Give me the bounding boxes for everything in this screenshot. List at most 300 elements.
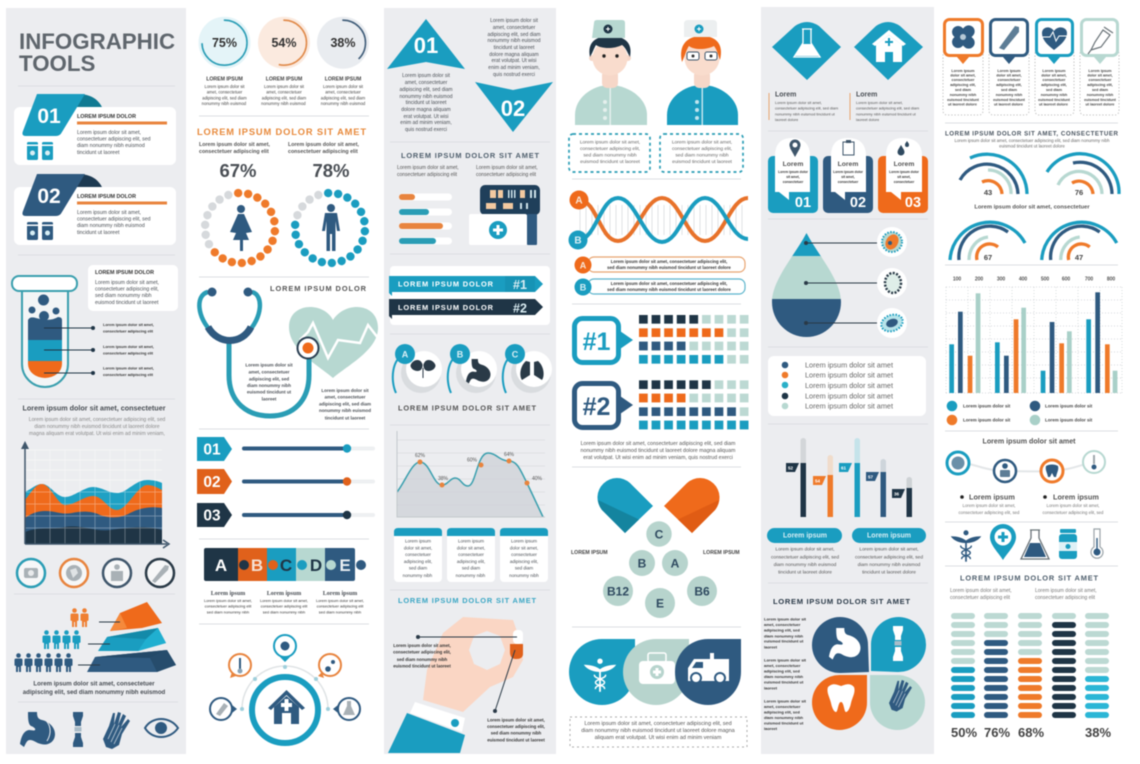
progress circles — [198, 17, 369, 106]
petal text: diam nonummy nibh — [764, 715, 804, 720]
vitamin circles: A — [671, 556, 680, 570]
card 02: consectetuer adipiscing elit, sed — [77, 216, 151, 222]
three cards: Lorem ipsum — [458, 538, 484, 544]
icon: first aid kit — [639, 653, 675, 684]
petal text: Lorem ipsum dolor sit — [764, 658, 807, 662]
pills: diam nonummy nibh euismod — [858, 562, 921, 568]
card 01: diam nonummy nibh euismod — [77, 143, 145, 149]
three cards: nonummy nibh — [509, 573, 539, 578]
doctor captions: Lorem ipsum dolor sit amet, — [580, 140, 640, 146]
card 01 — [14, 94, 176, 165]
ribbon banners — [389, 266, 550, 325]
three cards: adipiscing elit, — [457, 559, 485, 564]
three cards: consectetuer — [511, 552, 537, 557]
icon: heart pulse — [1042, 27, 1067, 50]
pyramid caption: Lorem ipsum dolor sit amet, consectetuer — [33, 680, 155, 688]
framed icons: ut laoreet dolore — [948, 102, 977, 106]
medicine cabinet — [469, 185, 540, 245]
bar chart legend: Lorem ipsum dolor sit — [1045, 404, 1093, 408]
puzzle captions: Lorem ipsum — [267, 591, 301, 597]
three cards: Lorem ipsum — [511, 538, 537, 544]
percentages: 38% — [1085, 725, 1111, 740]
two text blocks — [959, 492, 1104, 515]
vitamin circles: E — [656, 596, 664, 610]
line chart: 64% — [504, 452, 515, 458]
petal text: euismod tincidunt ut — [764, 638, 804, 644]
framed icons: ut laoreet dolore — [1086, 102, 1114, 106]
stethoscope text: amet, consectetuer — [248, 370, 290, 374]
icon: pin — [790, 140, 800, 157]
icon: location pin — [990, 524, 1016, 560]
two text blocks: Lorem ipsum — [1053, 492, 1099, 502]
puzzle bar: B — [251, 556, 263, 575]
DNA legend: Lorem ipsum dolor sit amet, consectetuer adipiscing elit, — [611, 259, 727, 264]
petal text: adipiscing elit, sed — [764, 710, 800, 714]
tabbed cards: Lorem ipsum dolor — [778, 170, 809, 174]
framed icons: dolor sit amet, — [1041, 74, 1067, 78]
icon: clipboard — [843, 140, 854, 155]
petal text: Lorem ipsum dolor sit — [764, 698, 807, 704]
diamond flask — [772, 22, 841, 80]
DNA legend: A — [580, 260, 587, 270]
organ badges: C — [512, 350, 519, 360]
triangle 01 text: erat volutpat. Ut wisi — [403, 114, 449, 120]
petal text: amet, consectetuer — [764, 704, 801, 709]
puzzle captions: Lorem ipsum dolor sit amet, — [204, 598, 252, 603]
triangle 02: 02 — [501, 96, 525, 121]
subtext: Lorem ipsum dolor sit amet, — [397, 165, 459, 171]
dashed note: aliquam erat volutpat. Ut wisi enim ad minim veniam — [595, 735, 722, 741]
petal text: euismod tincidunt ut — [764, 680, 804, 684]
subtext: consectetuer adipiscing elit — [397, 172, 458, 178]
tube labels: Lorem ipsum dolor sit amet, — [103, 345, 154, 349]
vitamin circles: B — [638, 556, 647, 570]
doctor captions: sed diam nonummy nibh — [675, 152, 729, 158]
drop gauge — [770, 230, 877, 339]
progress circles: amet, consectetuer — [325, 90, 361, 94]
puzzle bar: D — [310, 556, 322, 575]
organ badges: A — [402, 350, 409, 360]
tube labels: consectetuer adipiscing elit — [103, 330, 154, 334]
two text blocks: Lorem ipsum — [969, 492, 1015, 502]
subtext: euismod tincidunt ut laoreet dolore — [999, 144, 1065, 148]
arc gauge 67 — [950, 222, 1025, 262]
puzzle captions: sed diam nonummy nibh — [207, 610, 249, 614]
tube labels: Lorem ipsum dolor sit amet, — [103, 323, 154, 327]
percentages: 68% — [1018, 725, 1044, 740]
organ badges — [393, 344, 552, 393]
percentages: 50% — [951, 725, 977, 740]
puzzle bar: C — [280, 556, 292, 575]
male 78 percent — [289, 160, 371, 269]
horizontal bars — [399, 194, 452, 244]
progress circles: nonummy nibh euismod — [261, 101, 306, 106]
three cards: adipiscing elit, — [404, 559, 432, 564]
DNA helix: B — [574, 236, 582, 246]
progress circles: adipiscing elit, sed diam — [202, 96, 247, 100]
stethoscope text: nonummy nibh euismod — [319, 408, 371, 413]
triangle 02 text: dolore magna aliquam — [489, 52, 539, 58]
progress circles: Lorem ipsum dolor sit — [323, 84, 364, 89]
callout #2: #2 — [583, 393, 610, 421]
icon circles row — [17, 559, 174, 587]
triangle 02 text — [487, 18, 541, 78]
tabbed cards: sit amet, — [841, 175, 855, 179]
pills: diam nonummy nibh euismod — [774, 562, 837, 568]
pills: consectetuer adipiscing elit, sed — [855, 554, 923, 560]
three cards: nonummy nibh — [403, 573, 433, 578]
vertical bars: 54 — [815, 478, 820, 484]
progress circles: amet, consectetuer — [207, 90, 243, 94]
tabbed cards: consectetuer — [894, 180, 915, 184]
two text blocks: consectetuer adipiscing elit, sed — [1043, 510, 1104, 515]
pills: Lorem ipsum — [783, 532, 827, 540]
progress circles: Lorem ipsum dolor sit — [204, 84, 245, 89]
framed icons: consectetuer — [1043, 78, 1066, 82]
tabbed cards — [768, 138, 928, 213]
petal text: laoreet — [764, 726, 778, 731]
lorem notes: laoreet dolore — [856, 118, 879, 122]
framed icons: adipiscing elit, — [996, 83, 1022, 87]
card 01: consectetuer adipiscing elit, sed — [77, 136, 151, 142]
two text blocks: consectetuer adipiscing elit, sed — [959, 510, 1020, 515]
stethoscope text: diam nonummy nibh — [247, 383, 291, 388]
ribbon banners: #2 — [513, 302, 527, 316]
hand holding pill: sed diam nonummy nibh — [491, 730, 542, 736]
card 02: tincidunt ut laoreet — [77, 230, 120, 236]
callout #1 — [574, 318, 633, 362]
dashed note: Lorem ipsum dolor sit amet, consectetuer adipiscing elit, sed — [584, 721, 732, 727]
three cards: nonummy nibh — [456, 573, 486, 578]
lorem notes: Lorem ipsum dolor sit amet, — [856, 101, 903, 105]
triangle 02 text: enim ad minim veniam, — [488, 65, 540, 71]
doctor captions: consectetuer adipiscing elit, — [580, 146, 640, 152]
stethoscope text: Lorem ipsum dolor sit — [245, 362, 293, 368]
petal text: Lorem ipsum dolor sit — [764, 616, 807, 622]
petal text: adipiscing elit, sed — [764, 668, 800, 674]
doctor captions — [569, 134, 743, 172]
petal text: diam nonummy nibh — [764, 634, 804, 638]
line chart: 38% — [438, 476, 449, 482]
lorem notes: laoreet dolore — [775, 118, 798, 122]
doctor captions: euismod tincidunt ut laoreet — [580, 159, 641, 165]
arc gauge 43 — [960, 154, 1027, 197]
bar chart: 600 — [1062, 276, 1070, 282]
numbered sliders — [197, 437, 375, 527]
medical icon row — [951, 524, 1103, 562]
two text blocks: Lorem ipsum dolor sit amet, — [962, 503, 1016, 508]
stethoscope text: tincidunt ut laoreet — [325, 416, 366, 420]
framed icons: euismod tincidunt — [1084, 98, 1117, 102]
subtext: consectetuer adipiscing elit — [476, 172, 537, 178]
hand holding pill: consectetuer adipiscing elit, — [393, 650, 451, 654]
petal text: adipiscing elit, sed — [764, 628, 800, 632]
vitamin circles: B6 — [694, 584, 710, 598]
progress circles: LOREM IPSUM — [325, 76, 361, 82]
drop icons — [569, 639, 741, 705]
organ badges: B — [457, 350, 464, 360]
heart — [289, 307, 378, 378]
pills: Lorem ipsum dolor sit amet, — [775, 546, 835, 552]
stethoscope text: euismod tincidunt ut — [247, 390, 292, 394]
tube labels: consectetuer adipiscing elit — [103, 373, 154, 377]
tube text card: consectetuer adipiscing elit, — [95, 286, 159, 292]
numbered sliders: 03 — [203, 508, 221, 524]
pyramid caption: adipiscing elit, sed diam nonummy nibh euismod — [23, 689, 166, 696]
framed icons: dolor sit amet, — [996, 74, 1022, 78]
triangle 01 text — [399, 73, 453, 133]
framed icons: sed diam — [1001, 88, 1018, 92]
stethoscope text: amet, consectetuer — [324, 394, 366, 400]
framed icons: sed diam — [1092, 88, 1109, 92]
puzzle captions: consectetuer adipiscing elit — [317, 604, 364, 608]
subheads: Lorem ipsum dolor sit amet, — [288, 142, 359, 148]
doctor captions: consectetuer adipiscing elit, — [672, 146, 732, 152]
framed icons: Lorem ipsum — [1088, 69, 1112, 73]
tabbed cards: consectetuer — [838, 180, 859, 184]
icon: syringe — [1088, 27, 1113, 54]
line chart: 60% — [467, 458, 478, 464]
three cards: sed diam — [462, 566, 480, 570]
doctor 2 — [667, 20, 738, 125]
puzzle captions: Lorem ipsum — [211, 591, 245, 597]
tube labels: Lorem ipsum dolor sit amet, — [103, 366, 154, 370]
progress circles: LOREM IPSUM — [206, 76, 243, 82]
framed icons: ut laoreet dolore — [1039, 102, 1068, 106]
arc gauge 76: 76 — [1075, 188, 1083, 197]
chart heading: Lorem ipsum dolor sit amet, consectetuer adipiscing elit, sed — [29, 417, 165, 423]
hand holding pill: Lorem ipsum dolor sit amet, — [393, 643, 451, 648]
bar chart: 800 — [1107, 276, 1115, 282]
DNA helix: A — [575, 196, 583, 206]
puzzle bar — [204, 548, 366, 581]
DNA legend — [574, 256, 745, 296]
triangle 02 text: quis nostrud exerci — [493, 72, 535, 78]
percentages — [951, 725, 1111, 740]
progress circles: 54% — [271, 36, 297, 50]
bar chart: 400 — [1019, 276, 1027, 282]
panel: column 2 — [197, 17, 378, 743]
tube text card — [88, 265, 178, 311]
triangle 01 text: enim ad minim veniam, — [400, 120, 452, 126]
test tube — [12, 276, 95, 387]
tube labels: consectetuer adipiscing elit — [103, 352, 154, 356]
vertical bars: 36 — [894, 492, 899, 496]
framed icons: consectetuer — [952, 78, 975, 82]
legend card — [768, 356, 926, 416]
triangle 01 text: amet, consectetuer — [405, 80, 448, 86]
petals — [812, 617, 926, 730]
icon: ambulance — [688, 653, 729, 683]
tabbed cards: sit amet, — [786, 175, 800, 179]
framed icons: consectetuer — [1089, 78, 1112, 82]
stack subtext: Lorem ipsum dolor sit amet, — [1035, 588, 1097, 594]
bar chart: 500 — [1041, 276, 1049, 282]
icon: thermometer — [1091, 529, 1103, 558]
two text blocks: Lorem ipsum dolor sit amet, — [1046, 503, 1100, 508]
three cards: sed diam — [409, 566, 427, 570]
arc gauge 47 — [1042, 222, 1117, 262]
connected icons — [947, 451, 1105, 482]
title: TOOLS — [19, 51, 95, 76]
tube text card: LOREM IPSUM DOLOR — [95, 270, 154, 276]
bar chart: 100 — [953, 276, 961, 282]
ribbon banners: #1 — [513, 278, 527, 292]
icon: caduceus — [584, 658, 616, 692]
card 02: LOREM IPSUM DOLOR — [77, 194, 136, 200]
bar chart: 200 — [975, 276, 983, 282]
lorem notes: Lorem ipsum dolor sit amet, — [775, 101, 822, 105]
bar chart legend: Lorem ipsum dolor sit — [963, 404, 1011, 408]
stethoscope text — [245, 362, 371, 420]
petal text: laoreet — [764, 686, 778, 690]
vitamin circles: B12 — [607, 584, 629, 598]
legend card: Lorem ipsum dolor sit amet — [805, 392, 893, 400]
vitamin circles: C — [655, 528, 664, 542]
heading: LOREM IPSUM DOLOR SIT AMET — [401, 151, 539, 160]
icon: bandage — [950, 23, 977, 51]
stethoscope text: adipiscing elit, sed — [249, 376, 289, 382]
arc gauge 67: 67 — [984, 253, 992, 262]
puzzle captions: sed diam nonummy nibh — [319, 610, 361, 614]
icon: drops — [898, 141, 909, 156]
puzzle captions — [204, 591, 364, 614]
three cards: dolor sit amet, — [404, 546, 432, 550]
triangle 02 text: nonummy nibh euismod — [487, 38, 541, 44]
DNA helix — [568, 190, 748, 250]
chart heading: Lorem ipsum dolor sit amet, consectetuer — [22, 404, 166, 412]
framed icons: dolor sit amet, — [1087, 74, 1113, 78]
stack subtext: consectetuer adipiscing elit — [1035, 595, 1096, 601]
framed icons: adipiscing elit, — [950, 83, 976, 87]
tabbed cards: Lorem ipsum dolor — [833, 170, 864, 174]
panel: column 6 — [943, 20, 1122, 740]
pills: tincidunt ut laoreet dolore — [862, 570, 916, 576]
vertical bars: 57 — [868, 474, 873, 480]
stethoscope text: adipiscing elit, sed diam — [319, 402, 371, 406]
vitamin circles — [571, 521, 740, 618]
stethoscope text: laoreet — [262, 396, 277, 402]
stethoscope — [199, 288, 318, 416]
diamond house — [854, 22, 923, 80]
panel: column 1 — [6, 8, 186, 754]
three cards: dolor sit amet, — [457, 546, 485, 550]
female 67 percent — [199, 160, 281, 269]
pills: Lorem ipsum — [867, 532, 911, 540]
hand holding pill: Lorem ipsum dolor sit amet, — [487, 718, 545, 722]
progress circles: adipiscing elit, sed diam — [262, 96, 307, 100]
triangle 02 text: amet, consectetuer — [493, 25, 536, 31]
icon: jar — [1059, 529, 1077, 559]
petal text: amet, consectetuer — [764, 622, 801, 627]
progress circles: 75% — [212, 36, 237, 50]
stack subtext — [950, 588, 1097, 601]
pin icons — [210, 635, 360, 720]
triangle 02 text: erat volutpat. Ut wisi — [491, 58, 537, 64]
puzzle captions: Lorem ipsum — [323, 591, 357, 597]
female 67 percent: 67% — [219, 160, 257, 181]
framed icons: nonummy nibh — [1087, 93, 1114, 97]
framed icons: consectetuer — [998, 78, 1021, 82]
triangle 02 text: tincidunt ut laoreet — [494, 45, 535, 51]
framed icons: nonummy nibh — [1041, 93, 1068, 97]
numbered sliders: 01 — [203, 442, 221, 458]
card 02: 02 — [37, 185, 61, 208]
dashed note — [570, 717, 747, 747]
subtext — [397, 165, 538, 178]
progress circles: adipiscing elit, sed diam — [321, 96, 366, 100]
subheads: consectetuer adipiscing elit — [288, 149, 358, 155]
area chart — [21, 441, 169, 548]
card 01: LOREM IPSUM DOLOR — [77, 114, 136, 120]
doctor captions: Lorem ipsum dolor sit amet, — [672, 140, 732, 146]
male 78 percent: 78% — [312, 160, 350, 181]
framed icons: sed diam — [955, 88, 972, 92]
framed icons: dolor sit amet, — [950, 74, 976, 78]
stack heading: LOREM IPSUM DOLOR SIT AMET — [960, 574, 1098, 582]
people pyramid — [14, 602, 176, 672]
card 02: diam nonummy nibh euismod — [77, 223, 145, 229]
triangle 01 text: tincidunt ut laoreet — [406, 100, 447, 106]
tabbed cards: 03 — [905, 195, 921, 211]
chart heading: magna aliquam erat volutpat. Ut wisi enim ad minim veniam, — [29, 431, 165, 437]
puzzle captions: consectetuer adipiscing elit — [261, 604, 308, 608]
arc heading: Lorem ipsum dolor sit amet, consectetuer — [974, 204, 1090, 210]
DNA legend: sed diam nonummy nibh euismod tincidunt ut laoreet dolore — [607, 287, 731, 292]
hand holding pill: euismod tincidunt ut laoreet — [393, 664, 451, 668]
puzzle captions: Lorem ipsum dolor sit amet, — [260, 598, 308, 603]
triangle 02 — [475, 82, 553, 132]
line chart — [397, 431, 545, 517]
hand holding pill: sed diam nonummy nibh — [397, 657, 448, 662]
tabbed cards: Lorem — [894, 161, 914, 168]
pyramid caption — [23, 680, 166, 696]
DNA legend: B — [580, 282, 587, 292]
triangle 01 text: nonummy nibh euismod — [399, 94, 453, 100]
card 01: Lorem ipsum dolor sit amet, — [77, 130, 141, 136]
three cards: sed diam — [515, 566, 533, 570]
vertical bars: 61 — [841, 466, 846, 470]
stethoscope text: Lorem ipsum dolor sit — [321, 388, 369, 393]
bar chart: 700 — [1085, 276, 1093, 282]
progress circles: LOREM IPSUM — [266, 76, 302, 82]
three cards — [394, 528, 548, 582]
chart heading — [22, 404, 166, 437]
framed icons: adipiscing elit, — [1087, 83, 1113, 87]
framed icons: Lorem ipsum — [997, 69, 1021, 73]
lorem notes: nonummy nibh euismod tincidunt ut — [856, 112, 917, 116]
triangle 01: 01 — [414, 33, 438, 58]
line chart: 62% — [415, 453, 426, 459]
ribbon banners: LOREM IPSUM DOLOR — [398, 303, 494, 312]
paragraph — [581, 441, 736, 461]
DNA legend: Lorem ipsum dolor sit amet, consectetuer adipiscing elit, — [611, 281, 727, 286]
tabbed cards: Lorem ipsum dolor — [889, 170, 920, 174]
stethoscope heading: LOREM IPSUM DOLOR — [270, 284, 367, 293]
teal heading: LOREM IPSUM DOLOR SIT AMET — [398, 596, 536, 605]
puzzle bar: E — [339, 556, 351, 575]
tabbed cards: consectetuer — [783, 180, 804, 184]
title: INFOGRAPHIC — [19, 29, 175, 54]
legend card: Lorem ipsum dolor sit amet — [805, 370, 893, 380]
framed icons: euismod tincidunt — [993, 98, 1026, 102]
panel: column 5 — [761, 7, 934, 754]
framed icons — [943, 20, 1119, 115]
heading: LOREM IPSUM DOLOR SIT AMET — [773, 597, 910, 606]
lorem notes: Lorem — [775, 92, 796, 98]
doctor 1 — [575, 20, 647, 125]
card 01: 01 — [37, 105, 61, 128]
